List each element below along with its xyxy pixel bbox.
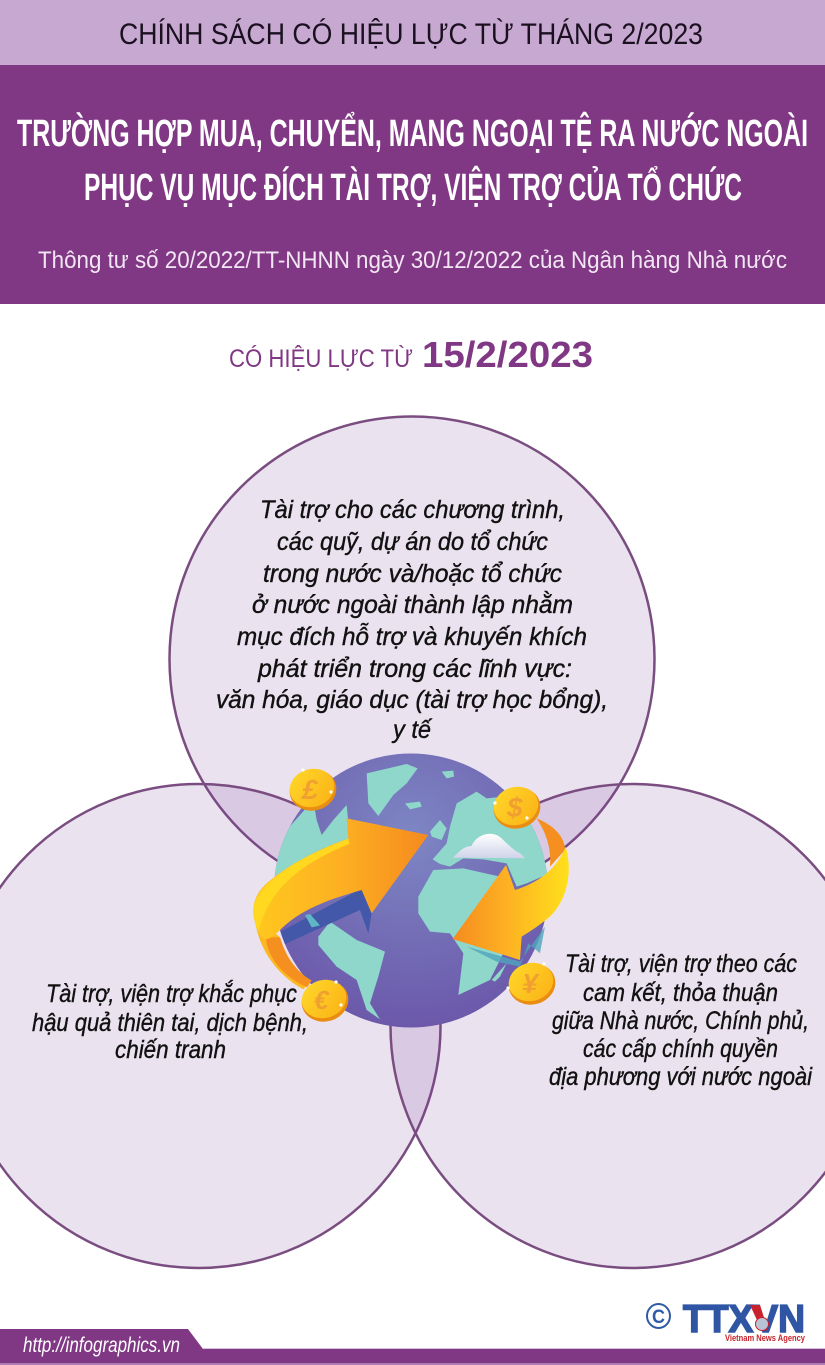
text: left circle bbox=[32, 979, 308, 1064]
text: top circle: văn hóa, giáo dục (tài trợ học bổng), bbox=[216, 686, 608, 714]
text: right circle: cam kết, thỏa thuận bbox=[583, 979, 778, 1007]
text: left circle: hậu quả thiên tai, dịch bệnh, bbox=[32, 1009, 308, 1037]
text: top circle: ở nước ngoài thành lập nhằm bbox=[252, 590, 573, 619]
text: top circle: các quỹ, dự án do tổ chức bbox=[277, 528, 548, 556]
logo: TTXVN: TTXVN bbox=[683, 1298, 805, 1341]
effective date: CÓ HIỆU LỰC TỪ bbox=[229, 344, 413, 373]
icon: yen coin: ¥ bbox=[522, 968, 540, 999]
icon: euro coin bbox=[297, 975, 353, 1027]
text: right circle: các cấp chính quyền bbox=[583, 1035, 778, 1063]
title panel bbox=[0, 65, 825, 304]
text: top circle: Tài trợ cho các chương trình, bbox=[260, 496, 565, 524]
top band bbox=[0, 0, 825, 65]
circle: left bbox=[0, 784, 440, 1268]
icon: euro coin: € bbox=[314, 985, 330, 1015]
text: top circle: phát triển trong các lĩnh vực: bbox=[257, 655, 572, 683]
icon: globe with currency arrows bbox=[253, 754, 569, 1028]
footer band bbox=[0, 1329, 825, 1365]
footer band: http://infographics.vn bbox=[23, 1334, 180, 1357]
icon: yen coin bbox=[504, 958, 560, 1010]
circle: top bbox=[170, 416, 654, 902]
top band: CHÍNH SÁCH CÓ HIỆU LỰC TỪ THÁNG 2/2023 bbox=[119, 18, 703, 51]
text: top circle: y tế bbox=[391, 716, 433, 744]
arrows bbox=[253, 818, 569, 989]
globe bbox=[270, 754, 550, 1028]
text: left circle: Tài trợ, viện trợ khắc phục bbox=[46, 979, 297, 1008]
logo: TTXVN: C bbox=[652, 1307, 665, 1328]
icon: cloud bbox=[453, 834, 525, 858]
icon: pound coin bbox=[285, 764, 341, 816]
circle: right bbox=[390, 784, 825, 1268]
text: top circle: mục đích hỗ trợ và khuyến khích bbox=[237, 622, 587, 651]
text: top circle bbox=[216, 496, 608, 744]
icon: dollar coin: $ bbox=[506, 792, 523, 823]
text: top circle: trong nước và/hoặc tổ chức bbox=[263, 560, 562, 588]
logo: TTXVN: Vietnam News Agency bbox=[725, 1333, 805, 1343]
effective date bbox=[229, 334, 593, 375]
icon: pound coin: £ bbox=[301, 774, 319, 805]
icon: dollar coin bbox=[489, 782, 545, 834]
text: right circle bbox=[549, 950, 813, 1091]
text: left circle: chiến tranh bbox=[115, 1036, 226, 1064]
title panel: Thông tư số 20/2022/TT-NHNN ngày 30/12/2022 của Ngân hàng Nhà nước bbox=[38, 247, 787, 274]
effective date: 15/2/2023 bbox=[422, 334, 593, 375]
